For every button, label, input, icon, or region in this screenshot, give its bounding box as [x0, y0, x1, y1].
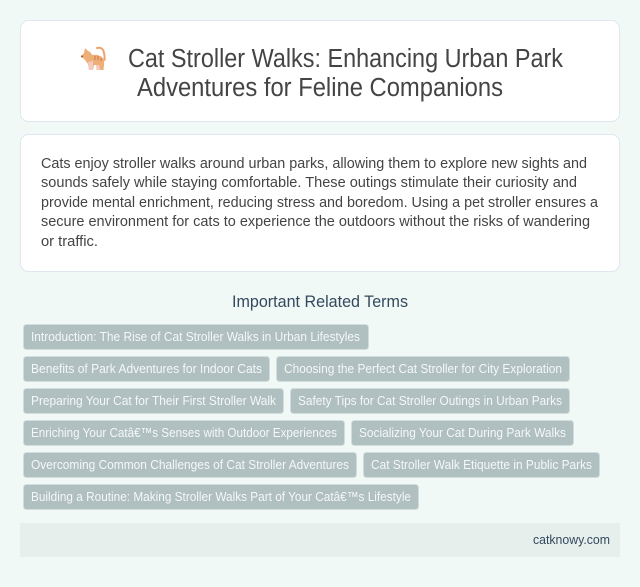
title text: [128, 45, 563, 102]
tag: routine: Building a Routine: Making Stroller Walks Part of Your Catâ€™s Lifestyle: [31, 489, 411, 504]
icon: orange cat: [81, 48, 105, 70]
tag: introduction: [24, 324, 368, 350]
tag: etiquette: [364, 452, 600, 478]
description paragraph: [41, 155, 599, 250]
title text: Cat Stroller Walks: Enhancing Urban Park: [128, 45, 563, 73]
tag list: [24, 324, 600, 510]
description paragraph: Cats enjoy stroller walks around urban parks, allowing them to explore new sights and: [41, 155, 587, 172]
tag: routine: [24, 484, 418, 510]
panel: description card: [20, 134, 620, 272]
tag: etiquette: Cat Stroller Walk Etiquette in Public Parks: [371, 457, 592, 472]
tag: choosing: Choosing the Perfect Cat Stroller for City Exploration: [284, 361, 562, 376]
footer: [20, 523, 620, 557]
description paragraph: secure environment for cats to experience the outdoors without the risks of wandering: [41, 213, 590, 230]
tag: benefits: Benefits of Park Adventures for Indoor Cats: [31, 361, 262, 376]
tag: safety: Safety Tips for Cat Stroller Outings in Urban Parks: [298, 393, 562, 408]
heading: important related terms: Important Related Terms: [232, 292, 408, 311]
title text: Adventures for Feline Companions: [137, 74, 503, 102]
description paragraph: sounds safely while staying comfortable. These outings stimulate their curiosity and: [41, 174, 577, 191]
tag: preparing: [24, 388, 284, 414]
tag: preparing: Preparing Your Cat for Their First Stroller Walk: [31, 393, 276, 408]
tag: benefits: [24, 356, 270, 382]
description paragraph: provide mental enrichment, reducing stress and boredom. Using a pet stroller ensures a: [41, 194, 599, 211]
tag: enriching: Enriching Your Catâ€™s Senses with Outdoor Experiences: [31, 425, 337, 440]
description paragraph: or traffic.: [41, 233, 98, 250]
tag: socializing: [352, 420, 574, 446]
tag: socializing: Socializing Your Cat During Park Walks: [359, 425, 566, 440]
tag: choosing: [276, 356, 570, 382]
footer source text: catknowy.com: [533, 532, 610, 547]
tag: enriching: [24, 420, 344, 446]
panel: title card: [20, 20, 620, 122]
tag: introduction: Introduction: The Rise of Cat Stroller Walks in Urban Lifestyles: [31, 329, 360, 344]
tag: overcoming: Overcoming Common Challenges of Cat Stroller Adventures: [31, 457, 349, 472]
tag: overcoming: [24, 452, 356, 478]
tag: safety: [290, 388, 570, 414]
